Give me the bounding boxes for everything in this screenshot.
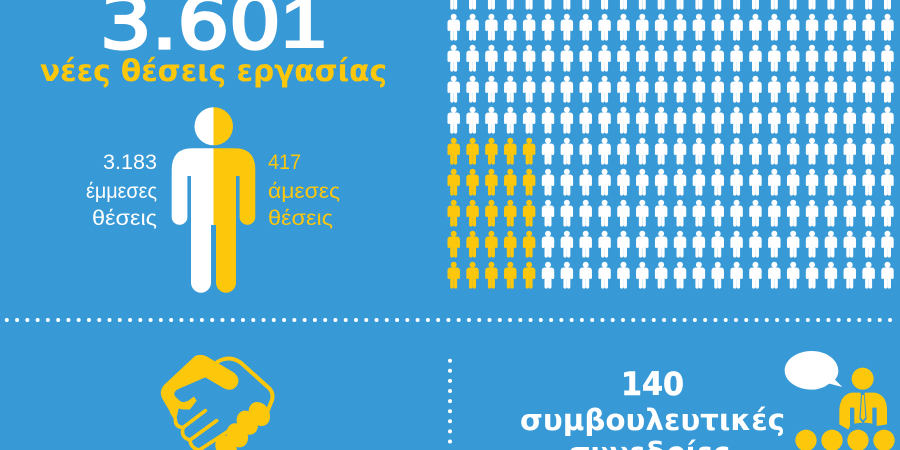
speaker	[839, 368, 887, 430]
icon: handshake	[161, 355, 274, 450]
direct jobs label	[268, 151, 340, 230]
audience	[795, 430, 895, 450]
icon: speaker with audience and speech bubble	[785, 351, 895, 450]
counselling sessions text: συμβουλευτικές	[520, 403, 785, 437]
indirect jobs label: έμμεσες	[86, 180, 157, 203]
direct jobs label: 417	[268, 151, 301, 174]
pictogram grid of people	[448, 0, 893, 288]
subtitle: new jobs: νέες θέσεις εργασίας	[40, 54, 387, 89]
counselling sessions text: 140	[621, 365, 684, 403]
counselling sessions text	[520, 365, 785, 450]
split person figure	[172, 107, 255, 293]
direct jobs label: άμεσες	[268, 180, 340, 203]
speech bubble	[785, 351, 842, 390]
indirect jobs label: 3.183	[103, 151, 157, 174]
indirect jobs label	[86, 151, 157, 230]
indirect jobs label: θέσεις	[92, 207, 157, 230]
direct jobs label: θέσεις	[268, 207, 333, 230]
